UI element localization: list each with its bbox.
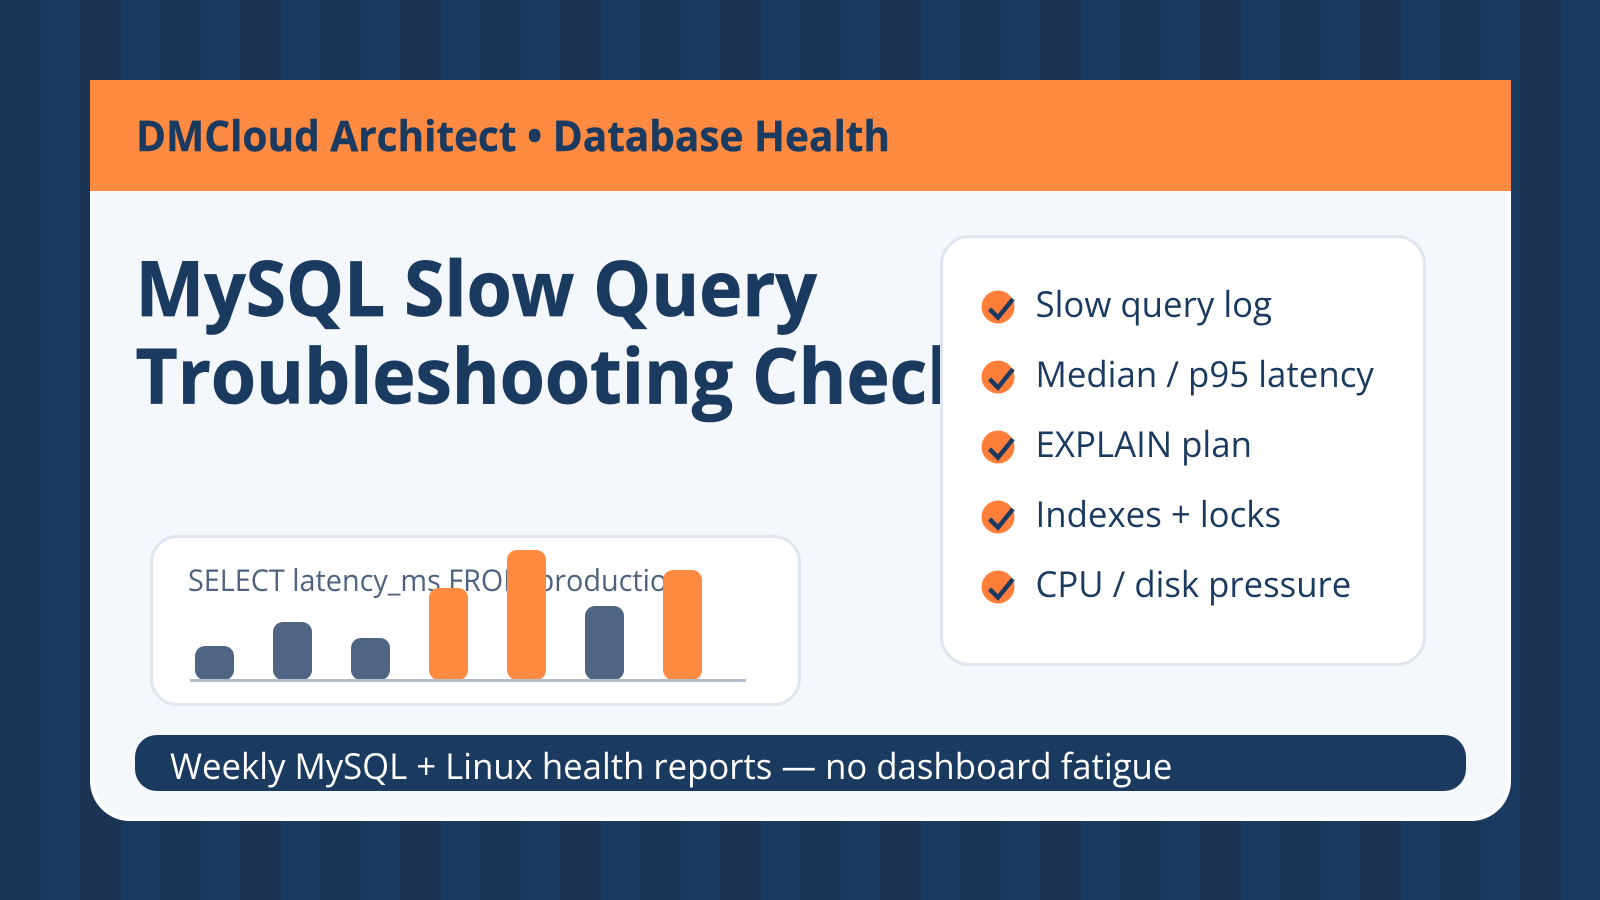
- call to action bar: [135, 735, 1466, 791]
- panel: checklist: [942, 236, 1424, 664]
- panel: latency chart: [152, 536, 800, 704]
- call to action text: Weekly MySQL + Linux health reports — no dashboard fatigue: [170, 741, 1172, 790]
- bar chart: [190, 550, 746, 682]
- title: MySQL Slow Query: [136, 234, 818, 338]
- checklist item: median latency: Median / p95 latency: [1036, 349, 1374, 398]
- checklist item: explain plan: EXPLAIN plan: [1036, 419, 1252, 468]
- title: [136, 234, 1085, 426]
- checklist item: cpu disk pressure: CPU / disk pressure: [1036, 559, 1351, 608]
- title: Troubleshooting Checklist: [136, 322, 1085, 426]
- checklist item: slow query log: Slow query log: [1036, 279, 1272, 328]
- checklist item: indexes and locks: Indexes + locks: [1036, 489, 1281, 538]
- header band: [90, 80, 1511, 191]
- chart query label: SELECT latency_ms FROM production: [188, 559, 685, 600]
- panel: main card: [90, 80, 1511, 821]
- header text: DMCloud Architect • Database Health: [136, 107, 890, 164]
